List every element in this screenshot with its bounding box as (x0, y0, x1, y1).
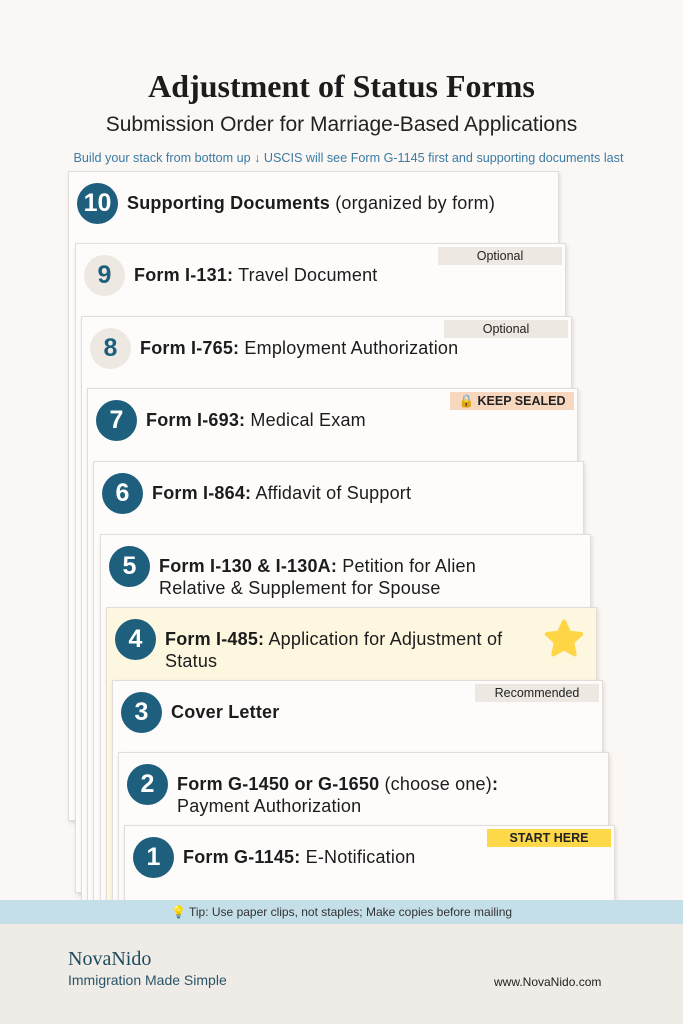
card 6 (93, 461, 584, 1024)
icon: star (544, 620, 584, 656)
tip bar (0, 900, 683, 924)
card 3: Recommended (495, 686, 579, 700)
card 1: START HERE (510, 831, 588, 845)
card 8: Form I-765: Employment Authorization (140, 338, 458, 358)
card 3: Cover Letter (171, 702, 279, 722)
card 7: 🔒 KEEP SEALED (458, 394, 566, 408)
card 6: 6 (116, 479, 129, 507)
title: Adjustment of Status Forms (148, 68, 535, 104)
card 5: Form I-130 & I-130A: Petition for Alien Relative & Supplement for Spouse (159, 556, 476, 598)
tagline: Immigration Made Simple (68, 972, 227, 988)
tip bar: 💡 Tip: Use paper clips, not staples; Make copies before mailing (171, 905, 512, 919)
card 5 (100, 534, 591, 1024)
card 10: Supporting Documents (organized by form) (127, 193, 495, 213)
card 4 (106, 607, 597, 1024)
card 8: Optional (483, 322, 529, 336)
card 9: Optional (477, 249, 523, 263)
footer (0, 924, 683, 1024)
card 4: 4 (129, 625, 142, 653)
card 7: Form I-693: Medical Exam (146, 410, 366, 430)
card 1: 1 (147, 843, 160, 871)
website: www.NovaNido.com (494, 975, 601, 989)
card 9: 9 (98, 261, 111, 289)
card 4: Form I-485: Application for Adjustment of Status (165, 629, 502, 671)
card 8: 8 (104, 334, 117, 362)
card 9: Form I-131: Travel Document (134, 265, 378, 285)
brand: NovaNido (68, 948, 151, 970)
card 1: Form G-1145: E-Notification (183, 847, 416, 867)
card 3 (112, 680, 603, 1024)
card 3: 3 (135, 698, 148, 726)
card 9 (75, 243, 566, 893)
card 2 (118, 752, 609, 1024)
card 10: 10 (84, 189, 111, 217)
subtitle: Submission Order for Marriage-Based Applications (106, 113, 577, 136)
instruction line: Build your stack from bottom up ↓ USCIS will see Form G-1145 first and supporting documents last (74, 151, 623, 165)
card 2: 2 (141, 770, 154, 798)
card 10 (68, 171, 559, 821)
card 6: Form I-864: Affidavit of Support (152, 483, 411, 503)
card 2: Form G-1450 or G-1650 (choose one): Payment Authorization (177, 774, 498, 816)
card 7 (87, 388, 578, 1024)
card 7: 7 (110, 406, 123, 434)
card 1 (124, 825, 615, 1024)
card 5: 5 (123, 552, 136, 580)
card 8 (81, 316, 572, 966)
